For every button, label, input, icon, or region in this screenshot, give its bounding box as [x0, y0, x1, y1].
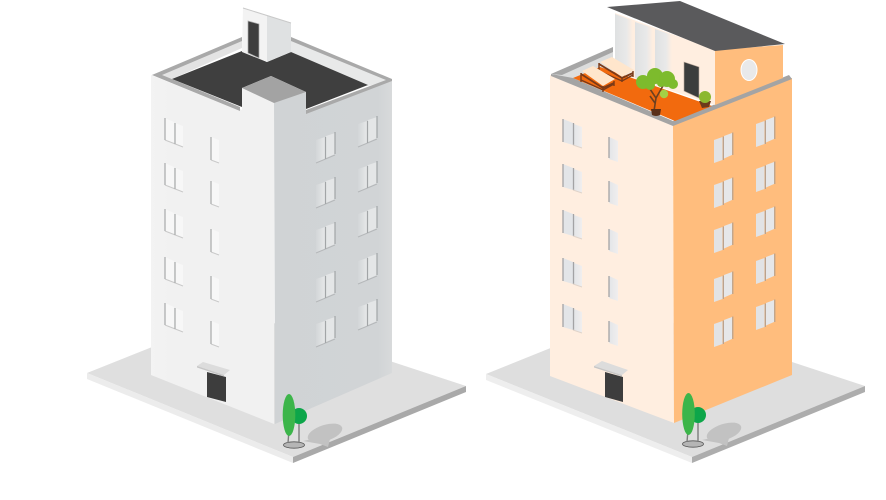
- ground slab: [486, 312, 865, 463]
- roof parapet: [152, 37, 392, 114]
- left wall windows column 1: [165, 118, 183, 332]
- left wall windows column 1: [563, 119, 582, 333]
- ground slab: [87, 312, 466, 463]
- terrace parapet: [551, 47, 792, 126]
- right wall windows column 1: [714, 132, 733, 347]
- rooftop stair access: [242, 8, 291, 62]
- right wall: [673, 78, 792, 423]
- entrance: [197, 362, 230, 402]
- penthouse round window: [741, 60, 757, 80]
- right wall windows column 2: [358, 116, 377, 330]
- terrace potted shrub: [699, 91, 711, 108]
- terrace floor: [573, 67, 712, 121]
- entrance: [594, 361, 628, 402]
- right wall windows column 1: [316, 132, 335, 347]
- sun loungers: [581, 57, 634, 92]
- left wall windows column 2: [211, 137, 219, 347]
- penthouse door: [684, 62, 699, 98]
- right building: orange with rooftop extension: [486, 1, 865, 463]
- left wall: [550, 75, 674, 423]
- left wall: [151, 75, 274, 424]
- door: [248, 21, 259, 58]
- right wall: [274, 80, 392, 424]
- stairwell block top: [242, 76, 306, 103]
- penthouse front wall: [615, 13, 715, 105]
- street trees: [283, 394, 307, 448]
- street tree shadow: [303, 420, 345, 447]
- left wall windows column 2: [609, 137, 618, 346]
- right wall windows column 2: [756, 116, 775, 330]
- penthouse roof: [607, 1, 785, 51]
- penthouse side wall: [715, 45, 783, 105]
- street trees: [682, 393, 706, 447]
- penthouse glazing: [615, 14, 672, 90]
- left building: plain grey: [87, 8, 466, 463]
- dark roof surface: [172, 51, 368, 109]
- street tree shadow: [702, 419, 744, 446]
- terrace tree: [636, 68, 678, 116]
